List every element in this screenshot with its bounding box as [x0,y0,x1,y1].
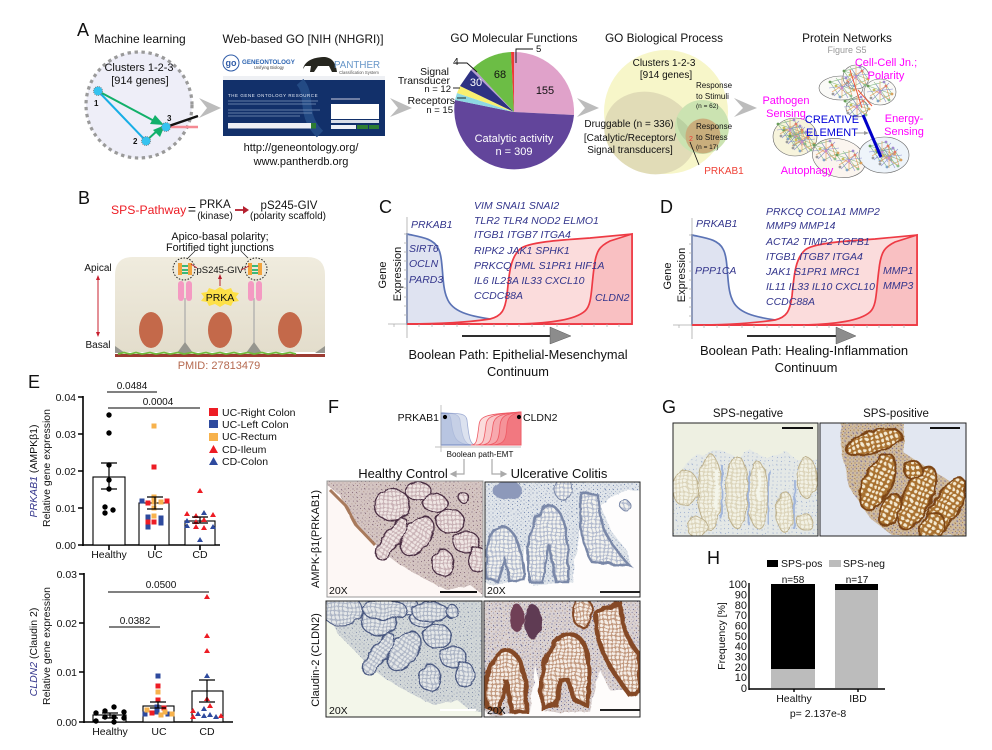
node labels: 3 [167,114,172,123]
SPS-negative image [672,423,818,537]
panel H: frequency chart [707,548,885,720]
gene lists: IL6 IL23A IL33 CXCL10 [474,275,585,287]
pie labels: 30 [470,77,482,89]
gene ontology logo: go [226,58,237,68]
venn labels: Druggable (n = 336) [584,119,674,130]
pathway equation: = [188,201,196,217]
gene lists: CCDC88A [766,296,815,308]
tick labels: 50 [735,631,747,643]
cluster text: [914 genes] [111,75,169,87]
network clusters [773,65,909,183]
category labels: Healthy [92,726,129,738]
panel F: IHC [310,397,640,725]
pathway equation: (kinase) [197,211,233,222]
network labels: Autophagy [781,165,834,177]
category labels [92,726,215,738]
pie labels: n = 309 [495,146,533,158]
tick labels: 0.02 [57,618,77,630]
pS245-GIV label: pS245-GIV [196,265,244,276]
label C: C [379,197,392,217]
gene lists: OCLN [409,258,439,270]
IHC healthy CLDN2 [326,602,482,716]
label H: H [707,548,720,568]
dashed cluster circle [86,52,192,158]
category labels: Healthy [91,549,128,561]
green arrow 1 to 3 [98,91,164,125]
label A: A [77,20,89,40]
screenshot [223,76,385,136]
axis title [377,247,404,301]
axis title: Expression [676,248,688,302]
tick labels [729,579,747,695]
category labels: CD [192,549,208,561]
gene lists [409,200,630,304]
path arrow [462,327,571,344]
category labels: IBD [849,693,867,705]
bars [93,477,215,545]
IHC frame and scale bar [485,482,640,597]
gray arrows [451,459,506,476]
panel A: web-based GO [222,32,385,168]
network labels: Pathogen [762,95,810,107]
tick labels: 0.03 [57,569,77,581]
pink and black outgoing lines [166,116,198,127]
column heads: Healthy Control [358,466,448,481]
pie labels: Receptors [408,96,455,107]
IHC frame and scale bar [327,481,483,597]
stacked bars [771,584,878,688]
legend: SPS-pos [781,558,822,570]
stimuli / stress labels: Response [696,81,733,90]
category labels: UC [147,549,163,561]
frame and scale bar [820,423,966,536]
caption: Continuum [487,364,549,379]
gene ontology logo: GENEONTOLOGY [242,59,296,66]
gene lists: MMP3 [883,280,913,292]
apical-basal axis: Basal [85,340,111,351]
stimuli / stress labels: to Stress [696,133,728,142]
pathway equation: PRKA [199,199,231,211]
stimuli / stress labels: (n = 62) [696,103,719,110]
heading: Machine learning: Machine learning [94,32,186,46]
gene ontology logo: Unifying Biology [254,65,285,70]
gene labels: CLDN2 [523,412,558,424]
arrow [199,98,221,118]
caption: Boolean Path: Healing-Inflammation [700,343,908,358]
pie labels: n = 12 [424,84,451,95]
panel A: protein networks [762,31,924,183]
legend [209,407,296,468]
PMID: PMID: 27813479 [178,360,260,372]
y axis titles [28,587,53,705]
venn circles [590,50,729,189]
PRKA burst: PRKA [206,292,234,304]
IHC frame and scale bar: 20X [329,585,348,597]
y axis titles: Relative gene expression [41,409,53,527]
gene lists: ITGB1 ITGB7 ITGA4 [766,251,863,263]
network labels: Energy- [885,113,924,125]
sample sizes: n=58 [782,575,805,586]
tick labels: 10 [735,672,747,684]
gene lists: SIRT6 [409,243,439,255]
pie chart [454,52,574,169]
gene labels [398,412,558,424]
axis title [662,248,688,302]
IHC frame and scale bar [326,601,482,717]
pie callouts [453,49,533,98]
healthy points [102,412,116,516]
basement membrane [115,352,325,357]
gene lists [695,206,913,308]
legend: CD-Ileum [222,444,267,456]
URL text: http://geneontology.org/ [244,142,358,154]
axis title: Expression [392,247,404,301]
network labels: Sensing [884,126,924,138]
stimuli / stress labels: 2 [689,136,693,143]
pie labels: Catalytic activity [475,133,554,145]
gene labels: PRKAB1 [398,412,439,424]
axes [79,573,233,723]
arrow [734,98,757,117]
tick labels: 0.03 [56,429,76,441]
UC points [140,424,170,530]
heading: Web-based GO: Web-based GO [NIH (NHGRI)] [222,32,384,46]
pathway equation: pS245-GIV [261,200,318,212]
label G: G [662,397,676,417]
legend: UC-Right Colon [222,407,296,419]
panel B: SPS pathway [78,188,326,372]
tight junctions [173,251,267,301]
panel D: healing curves [660,197,917,375]
tick labels: 20 [735,662,747,674]
URL text: www.pantherdb.org [253,156,348,168]
IHC UC AMPK [486,482,640,586]
tick labels: 0 [741,683,747,695]
tick labels [56,392,76,552]
significance: 0.0382 [120,616,151,627]
panel C: EMT curves [377,197,632,379]
tick labels: 0.00 [57,717,77,729]
heading: GO Biological Process [605,31,723,45]
frame and scale bar [673,423,818,536]
legend [767,558,885,570]
legend: CD-Colon [222,456,268,468]
PRKA burst [201,274,239,307]
IHC frame and scale bar: 20X [329,705,348,717]
gene lists: RIPK2 JAK1 SPHK1 [474,245,570,257]
axes [78,396,220,550]
mini Boolean path chart [435,405,521,452]
PRKAB1 callout: PRKAB1 [704,166,744,177]
node labels: 2 [133,137,138,146]
legend: UC-Left Colon [222,419,289,431]
pie labels: 4 [453,57,459,68]
network labels: ELEMENT [806,127,858,139]
IHC frame and scale bar: 20X [487,705,506,717]
arrow [390,98,412,117]
gene lists: PPP1CA [695,265,736,277]
IHC frame and scale bar [484,601,640,717]
tick labels: 70 [735,610,747,622]
IHC frame and scale bar: 20X [487,585,506,597]
panel G: SPS IHC [662,400,966,536]
label B: B [78,188,90,208]
pie labels: 155 [536,85,554,97]
tick labels: 30 [735,652,747,664]
column heads [358,466,608,481]
category labels [776,693,867,705]
Boolean path label: Boolean path-EMT [447,450,513,459]
y axis titles [28,409,53,527]
apical-basal axis [84,263,112,351]
figure reference: Figure S5 [827,45,867,55]
caption: Continuum [775,360,837,375]
gene lists: PRKCQ COL1A1 MMP2 [766,206,880,218]
pie labels: n = 15 [426,105,453,116]
gene lists: CLDN2 [595,292,630,304]
venn labels: Clusters 1-2-3 [633,58,696,69]
gene lists: PRKAB1 [696,218,737,230]
panel A: GO molecular functions pie [398,31,578,169]
stimuli / stress labels: (n = 17) [696,144,719,151]
tick labels: 100 [729,579,747,591]
tick labels: 0.00 [56,540,76,552]
y axis title: Frequency [%] [716,602,728,670]
curves [673,218,917,339]
nodes [94,86,170,146]
pie labels: 68 [494,69,506,81]
column heads [713,408,929,420]
gene lists: IL11 IL33 IL10 CXCL10 [766,281,875,293]
pie labels [398,44,554,158]
gene lists: PRKCQ PML S1PR1 HIF1A [474,260,605,272]
gene lists: TLR2 TLR4 NOD2 ELMO1 [474,215,599,227]
gene lists: MMP1 [883,265,913,277]
polarity label: Fortified tight junctions [166,242,275,254]
tick labels: 0.04 [56,392,76,404]
p value: p= 2.137e-8 [790,708,846,720]
panther logo [303,57,380,75]
venn labels: [914 genes] [640,70,692,81]
sample sizes: n=17 [846,575,869,586]
venn labels: [Catalytic/Receptors/ [584,133,676,144]
significance [107,381,200,408]
cluster text: Clusters 1-2-3 [104,62,174,74]
error bars [102,680,215,718]
label F: F [328,397,339,417]
label D: D [660,197,673,217]
gene lists: PRKAB1 [411,219,452,231]
gene lists: ACTA2 TIMP2 TGFB1 [765,236,870,248]
sample sizes [782,575,869,586]
label E: E [28,372,40,392]
tick labels: 40 [735,641,747,653]
gene lists: JAK1 S1PR1 MRC1 [765,266,860,278]
gene ontology logo [223,55,296,71]
pathway equation [111,199,326,222]
category labels: UC [151,726,167,738]
gene lists: CCDC88A [474,290,523,302]
bars [93,691,223,722]
axis title: Gene [377,262,389,288]
stimuli / stress labels: to Stimuli [696,92,729,101]
tick labels: 90 [735,590,747,602]
apical-basal axis: Apical [84,263,112,274]
IHC UC CLDN2 [484,597,640,717]
PRKAB1 callout [690,142,744,177]
tick labels [57,569,77,729]
network labels: Polarity [868,70,905,82]
error bars [101,463,208,523]
gene lists: VIM SNAI1 SNAI2 [474,200,559,212]
tick labels: 0.02 [56,466,76,478]
y axis titles: PRKAB1 (AMPKβ1) [28,425,40,517]
gene lists: MMP9 MMP14 [766,220,836,232]
column heads: SPS-negative [713,408,783,420]
category labels: CD [199,726,215,738]
column heads: SPS-positive [863,408,929,420]
curves [388,217,632,338]
significance [108,580,209,627]
IHC healthy AMPK [328,482,482,596]
UC points [142,674,174,718]
tick labels: 60 [735,620,747,632]
SPS-positive image [820,424,966,536]
pie labels: 5 [536,44,541,55]
screenshot: THE GENE ONTOLOGY RESOURCE [228,93,318,98]
legend: UC-Rectum [222,431,277,443]
axes [749,583,885,692]
nuclei [139,312,302,348]
row labels: AMPK-β1(PRKAB1) [310,490,322,588]
heading: GO Molecular Functions [450,31,578,45]
tick labels: 80 [735,600,747,612]
polarity label: Apico-basal polarity; [171,231,269,243]
panel A: machine learning [77,20,198,158]
panel E: CLDN2 chart [28,569,233,738]
y axis titles: Relative gene expression [41,587,53,705]
network labels: Sensing [766,108,806,120]
stimuli / stress labels: Response [696,122,733,131]
panel E: PRKAB1 chart [28,372,296,561]
green arrow 2 to 3 [146,125,165,141]
legend: SPS-neg [843,558,885,570]
pathway equation: (polarity scaffold) [250,211,326,222]
stimuli / stress labels [689,81,733,151]
significance: 0.0484 [117,381,148,392]
column heads: Ulcerative Colitis [511,466,608,481]
tick labels: 0.01 [56,503,76,515]
path arrow [747,327,856,344]
network labels: CREATIVE [805,114,859,126]
node labels [94,99,172,146]
CD points [190,594,224,719]
panther logo: Classification System [339,70,379,75]
row labels [310,490,322,707]
network labels: Cell-Cell Jn.; [855,57,917,69]
heading: Protein Networks [802,31,892,45]
category labels [91,549,208,561]
pie labels: Signal [420,67,449,78]
caption: Boolean Path: Epithelial-Mesenchymal [408,347,628,362]
pathway equation: SPS-Pathway [111,203,187,217]
significance: 0.0004 [143,397,174,408]
y axis titles: CLDN2 (Claudin 2) [28,608,40,696]
node labels: 1 [94,99,99,108]
cyan arrow 1 to 2 [98,91,146,141]
venn labels [584,58,696,156]
panther logo: PANTHER [334,60,380,71]
tick labels: 0.01 [57,667,77,679]
epithelial cells [115,257,325,353]
venn labels: Signal transducers] [587,145,673,156]
CD points [184,488,216,542]
pie labels: Transducer [398,76,451,87]
row labels: Claudin-2 (CLDN2) [310,613,322,707]
gene lists: PARD3 [409,274,443,286]
panel A: GO biological process venn [584,31,744,189]
significance: 0.0500 [146,580,177,591]
network labels [762,57,924,177]
arrow [577,98,599,117]
category labels: Healthy [776,693,813,705]
healthy points [93,704,127,725]
gene lists: ITGB1 ITGB7 ITGA4 [474,229,571,241]
axis title: Gene [662,263,674,289]
